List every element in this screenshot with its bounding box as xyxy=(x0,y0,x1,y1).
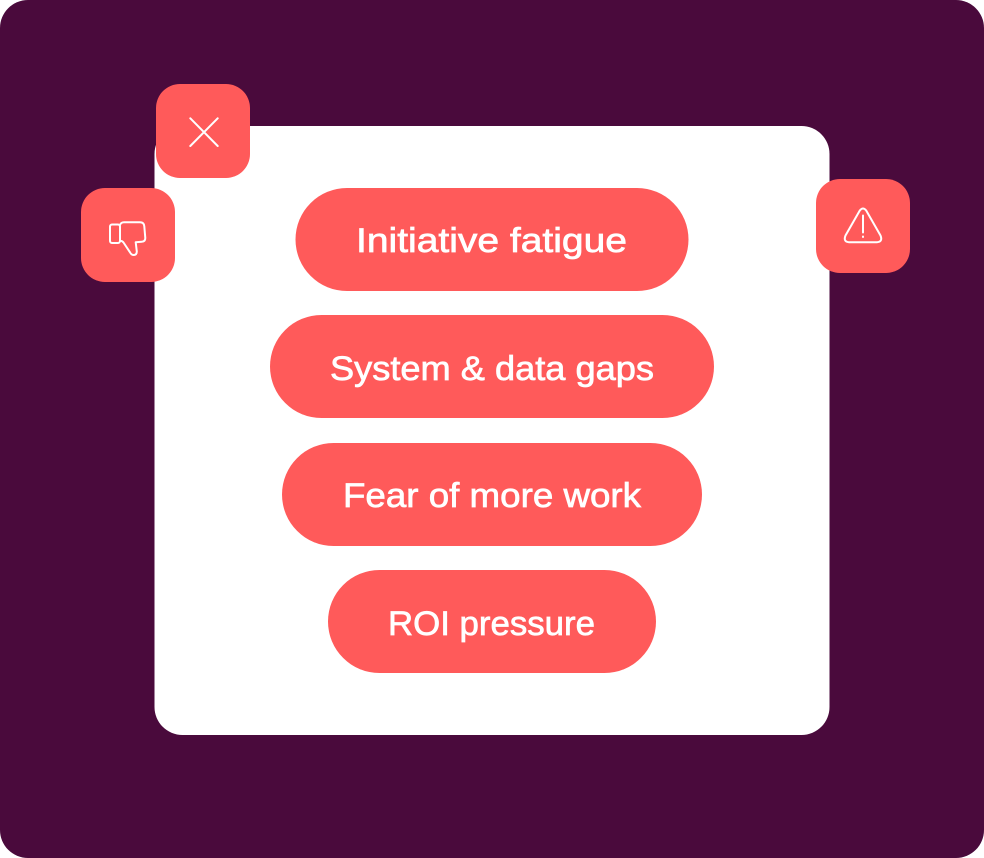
pill: System & data gaps xyxy=(270,315,714,418)
pill: Initiative fatigue xyxy=(296,188,688,291)
pill: Initiative fatigue: Initiative fatigue xyxy=(356,222,627,260)
icon: close tile xyxy=(156,84,250,178)
icon: warning tile xyxy=(816,179,910,273)
pill: Fear of more work xyxy=(282,443,702,546)
icon: thumbs down tile xyxy=(81,188,175,282)
white card xyxy=(154,126,830,735)
pill: Fear of more work: Fear of more work xyxy=(343,477,642,515)
pill: ROI pressure: ROI pressure xyxy=(388,605,595,643)
pill: System & data gaps: System & data gaps xyxy=(330,350,654,388)
pill: ROI pressure xyxy=(328,570,656,673)
